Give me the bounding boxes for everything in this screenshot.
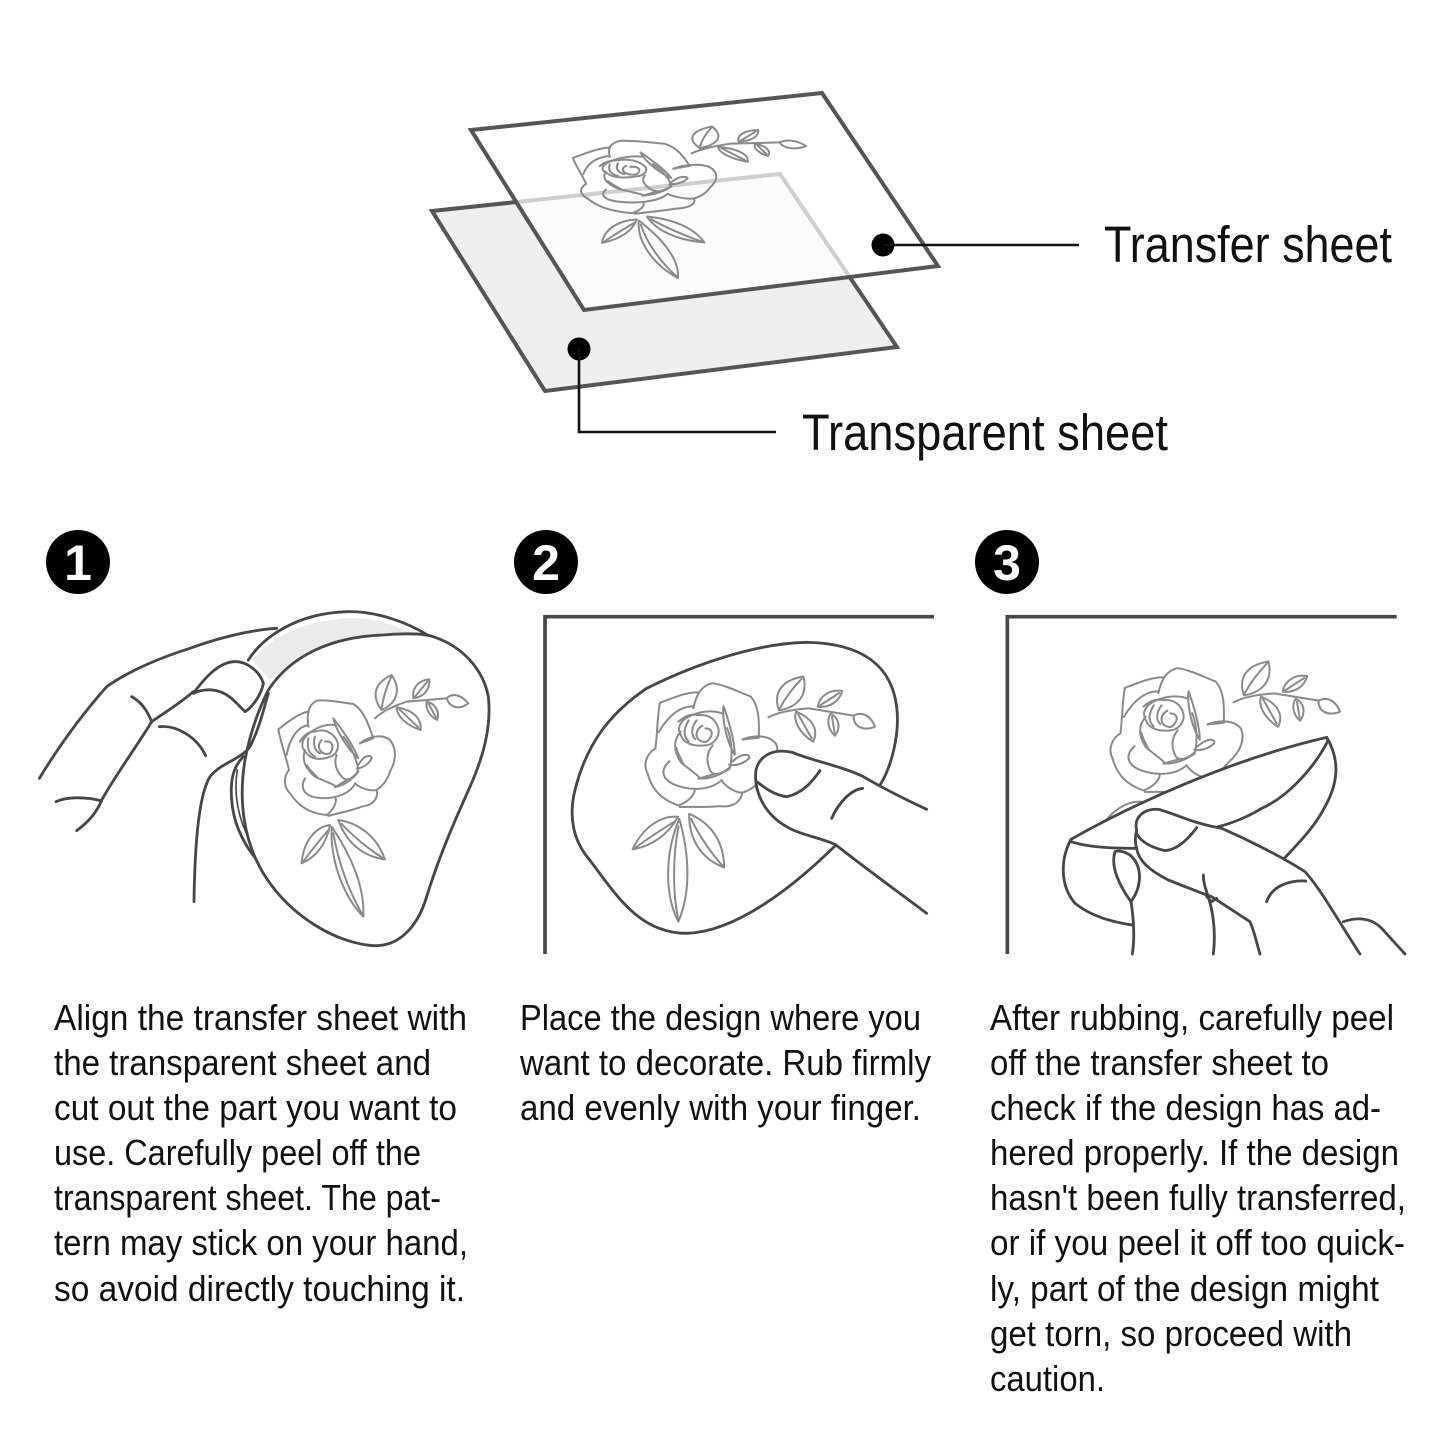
text: step 1 instructions: Align the transfer sheet with: [54, 997, 467, 1038]
rose design: [1052, 631, 1351, 935]
text: step 1 instructions: use. Carefully peel off the: [54, 1132, 421, 1173]
text: step 3 instructions: ly, part of the design might: [990, 1268, 1379, 1309]
step 1 badge: 1: [64, 535, 92, 591]
text: step 3 instructions: hered properly. If the design: [990, 1132, 1399, 1173]
text: step 3 instructions: or if you peel it off too quick-: [990, 1222, 1405, 1263]
text: step 2 instructions: want to decorate. Rub firmly: [519, 1042, 931, 1083]
step 3 badge: [975, 530, 1039, 594]
text: step 3 instructions: caution.: [990, 1358, 1105, 1399]
text: step 1 instructions: [54, 997, 468, 1309]
step 3 badge: 3: [993, 535, 1021, 591]
step 1 badge: [46, 530, 110, 594]
callout: transparent sheet: Transparent sheet: [802, 404, 1168, 461]
rose design on transfer sheet: [573, 124, 807, 280]
text: step 2 instructions: [519, 997, 931, 1128]
text: step 3 instructions: off the transfer sheet to: [990, 1042, 1329, 1083]
callout: transfer sheet: Transfer sheet: [1104, 216, 1392, 273]
rose design: [587, 646, 886, 950]
finger: [756, 751, 927, 913]
text: step 1 instructions: tern may stick on your hand,: [54, 1222, 468, 1263]
text: step 3 instructions: check if the design has ad-: [990, 1087, 1381, 1128]
callout: transfer sheet: [872, 216, 1392, 273]
text: step 1 instructions: transparent sheet. The pat-: [54, 1177, 441, 1218]
illustration: step 2 rubbing: [545, 617, 934, 954]
text: step 2 instructions: and evenly with your finger.: [520, 1087, 921, 1128]
diagram: stacked sheets: [432, 93, 938, 391]
text: step 2 instructions: Place the design where you: [520, 997, 921, 1038]
peeled sheet and fingers: [1063, 737, 1405, 958]
rose design: [278, 675, 468, 917]
text: step 3 instructions: [990, 997, 1406, 1399]
transparent sheet: [432, 174, 897, 391]
text: step 1 instructions: the transparent sheet and: [54, 1042, 431, 1083]
step 2 badge: [514, 530, 578, 594]
text: step 3 instructions: hasn't been fully transferred,: [990, 1177, 1406, 1218]
text: step 3 instructions: get torn, so proceed with: [990, 1313, 1352, 1354]
callout: transparent sheet: [568, 338, 1168, 461]
text: step 1 instructions: so avoid directly touching it.: [54, 1268, 465, 1309]
step 2 badge: 2: [532, 535, 560, 591]
text: step 1 instructions: cut out the part you want to: [54, 1087, 457, 1128]
text: step 3 instructions: After rubbing, carefully peel: [990, 997, 1394, 1038]
transfer sheet: [471, 93, 938, 310]
illustration: step 1 peeling: [39, 612, 489, 946]
illustration: step 3 peeling off: [1007, 617, 1405, 958]
